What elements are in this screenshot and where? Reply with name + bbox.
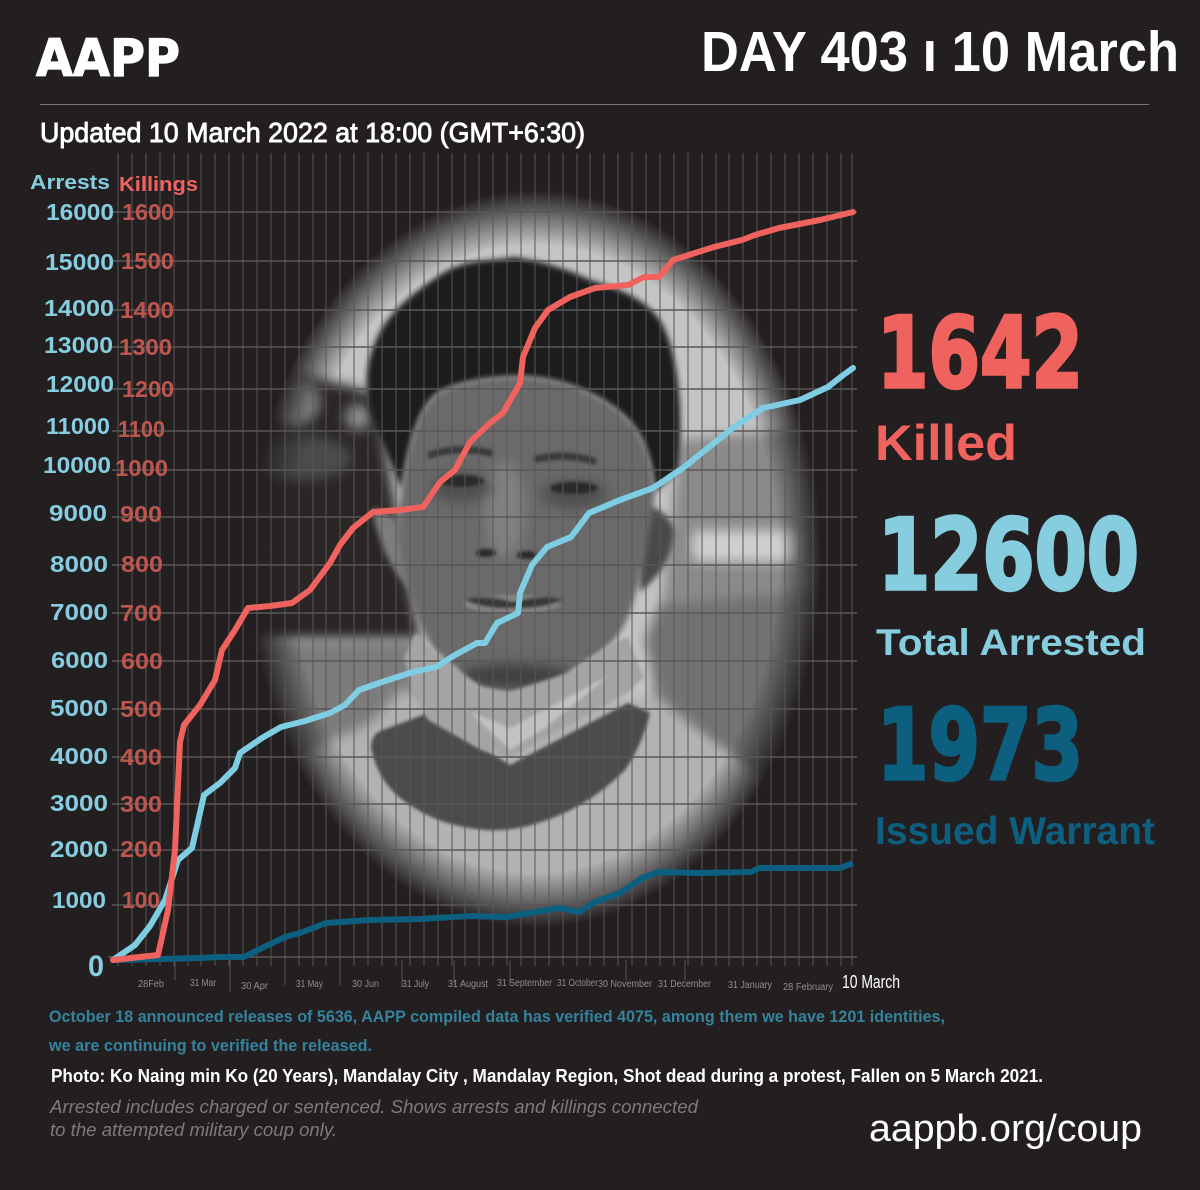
killings axis labels: 500 <box>120 696 162 722</box>
release note: we are continuing to verified the released. <box>48 1036 372 1055</box>
shirt <box>304 684 749 902</box>
stat: issued warrant: 1973 <box>877 689 1083 803</box>
killings axis labels: 1400 <box>120 297 174 323</box>
arrests line <box>113 368 853 960</box>
photo caption: Photo: Ko Naing min Ko (20 Years), Mandalay City , Mandalay Region, Shot dead during a protest, Fallen on 5 March 2021. <box>51 1066 1043 1086</box>
month labels <box>138 978 833 993</box>
killings axis labels: 1500 <box>121 248 174 274</box>
shirt collar opening <box>371 703 650 830</box>
chart grid <box>108 153 857 992</box>
raised arm <box>639 592 806 774</box>
killings axis labels: 1000 <box>115 455 168 481</box>
updated timestamp: Updated 10 March 2022 at 18:00 (GMT+6:30) <box>40 117 585 148</box>
arrests axis labels: 15000 <box>45 249 114 275</box>
killings axis labels: 1200 <box>122 376 174 402</box>
killings axis labels: 100 <box>122 887 160 913</box>
arrests axis labels: 7000 <box>50 599 108 625</box>
stat: killed <box>875 297 1083 471</box>
methodology note: to the attempted military coup only. <box>50 1120 337 1140</box>
arrests axis labels: 4000 <box>50 743 108 769</box>
ears <box>372 509 412 590</box>
stat: total arrested: Total Arrested <box>876 622 1146 663</box>
month labels: 31 May <box>296 979 323 990</box>
month labels: 30 Jun <box>352 979 379 990</box>
month labels: 30 November <box>598 979 653 990</box>
background right of head <box>647 426 816 708</box>
killings axis labels: 400 <box>120 744 162 770</box>
arrests axis labels: 14000 <box>44 295 114 321</box>
month labels: 31 Mar <box>190 978 217 989</box>
killings axis labels: 300 <box>120 791 162 817</box>
issued warrant line <box>113 863 853 960</box>
month labels: 31 August <box>448 979 488 990</box>
methodology note <box>49 1097 699 1140</box>
killings axis labels: 1100 <box>118 416 165 442</box>
month labels: 31 September <box>497 978 553 989</box>
arrests axis labels: 1000 <box>52 887 106 913</box>
face <box>399 377 655 692</box>
arrests axis labels: 9000 <box>49 500 107 526</box>
arrests axis labels: 2000 <box>50 836 108 862</box>
face shading <box>430 462 608 688</box>
eyes, brows, nose and mouth <box>428 446 598 613</box>
arrests axis labels: 3000 <box>50 790 108 816</box>
methodology note: Arrested includes charged or sentenced. Shows arrests and killings connected <box>49 1097 699 1117</box>
left sleeve <box>262 634 413 754</box>
month labels: 31 December <box>658 979 712 990</box>
stat: killed: 1642 <box>877 297 1083 411</box>
arrests axis labels: 10000 <box>43 452 111 478</box>
killings axis labels <box>115 199 174 913</box>
killings axis labels: 600 <box>121 648 163 674</box>
killings axis labels: 700 <box>120 600 162 626</box>
current date label: 10 March <box>842 972 900 992</box>
arrests axis labels: 0 <box>88 950 104 983</box>
arrests axis labels <box>43 199 114 983</box>
arrests axis labels: 12000 <box>46 371 114 397</box>
logo: AAPP <box>36 29 180 89</box>
arrests axis labels: 13000 <box>44 332 113 358</box>
arrests axis labels: 5000 <box>50 695 108 721</box>
killings axis labels: 200 <box>120 836 162 862</box>
stat: killed: Killed <box>875 415 1017 471</box>
month labels: 31 July <box>402 979 429 990</box>
release note <box>48 1007 945 1055</box>
button <box>531 935 561 953</box>
month labels: 31 October <box>557 978 599 989</box>
killings axis labels: 1300 <box>119 334 172 360</box>
arrests axis labels: 8000 <box>50 551 108 577</box>
stat: total arrested <box>876 499 1146 663</box>
divider <box>40 104 1149 105</box>
month labels: 28 February <box>783 982 833 993</box>
arrests axis labels: 16000 <box>46 199 114 225</box>
killings line <box>113 212 853 960</box>
killings axis labels: 900 <box>120 501 162 527</box>
killings axis labels: 1600 <box>122 199 174 225</box>
neck mask <box>404 633 644 758</box>
stat: issued warrant <box>875 689 1155 853</box>
axis title: killings: Killings <box>119 174 198 196</box>
stat: issued warrant: Issued Warrant <box>875 810 1155 853</box>
arrests axis labels: 6000 <box>51 647 108 673</box>
month labels: 31 January <box>728 980 772 991</box>
arrests axis labels: 11000 <box>46 413 110 439</box>
dark background left of head <box>250 370 426 644</box>
killings axis labels: 800 <box>121 551 163 577</box>
portrait photo <box>259 193 818 924</box>
month labels: 30 Apr <box>241 981 269 992</box>
hair <box>367 257 680 492</box>
release note: October 18 announced releases of 5636, AAPP compiled data has verified 4075, among them we have 1201 identities, <box>49 1007 945 1026</box>
website: aappb.org/coup <box>869 1108 1142 1150</box>
axis title: arrests: Arrests <box>30 172 110 194</box>
month labels: 28Feb <box>138 979 164 990</box>
